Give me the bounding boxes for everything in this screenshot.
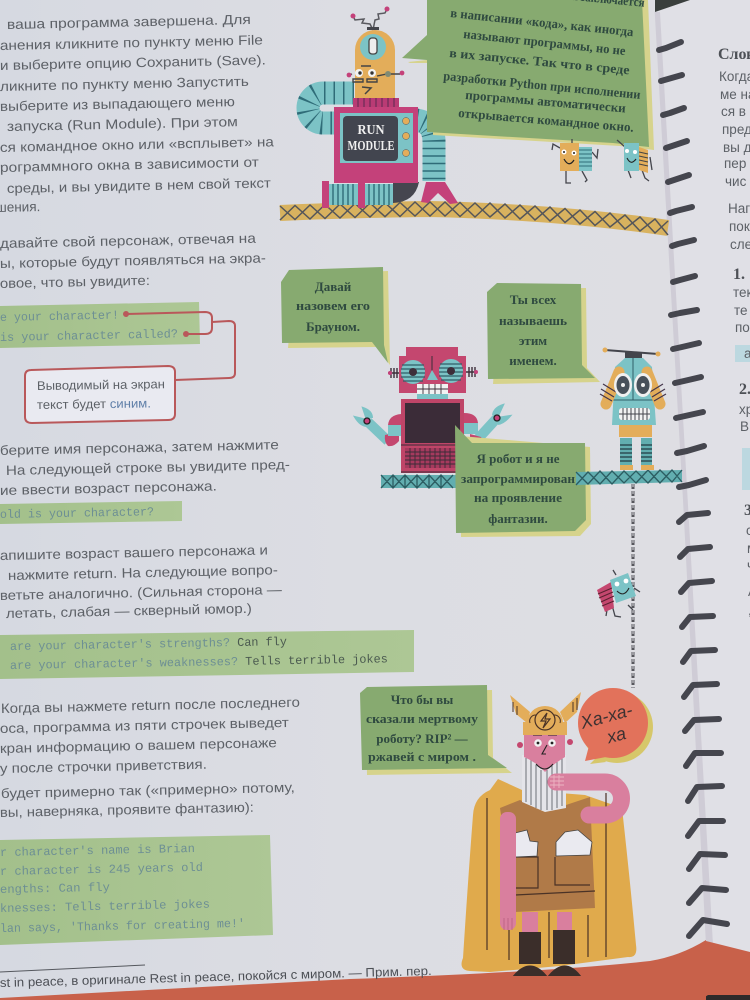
code block: greeting output: e your character! xyxy=(0,309,119,325)
collar xyxy=(353,98,399,109)
helmet xyxy=(523,722,567,735)
speech bubble: RIP: Что бы вы xyxy=(391,692,453,707)
head xyxy=(355,30,395,102)
speech bubble: RIP: сказали мертвому xyxy=(366,711,479,726)
legs and boots xyxy=(522,912,538,934)
speech bubble: code not launch: в их запуске. Так что в среде xyxy=(449,45,631,77)
speech bubble: you call everyone that xyxy=(487,283,600,384)
speech bubble: ha-ha-ha: Ха-ха- xyxy=(577,700,635,733)
body text: enter name: ие ввести возраст персонажа. xyxy=(0,478,217,498)
robot: run module xyxy=(308,6,458,208)
legs xyxy=(329,184,393,205)
next page text fragments: 1. xyxy=(733,266,745,283)
speech bubble: let's call him Brown: назовем его xyxy=(296,298,370,313)
speech bubble: ha-ha-ha xyxy=(577,688,653,764)
code block: age question: old is your character? xyxy=(0,505,154,522)
body xyxy=(401,399,464,473)
arms xyxy=(606,372,660,404)
code block: final output: r character's name is Brian xyxy=(0,842,195,860)
speech bubble: RIP xyxy=(360,685,512,775)
eyes xyxy=(401,360,425,384)
code block: final output: lan says, 'Thanks for creating me!' xyxy=(0,917,245,936)
body text: program output: оса, программа из пяти строчек выведет xyxy=(0,715,289,736)
speech bubble: ha-ha-ha: ха xyxy=(604,723,628,748)
screen label second line: MODULE xyxy=(348,139,394,154)
speech bubble: I am a robot xyxy=(455,425,591,537)
speech bubble: code not launch: в написании «кода», как иногда xyxy=(450,5,635,39)
left arm xyxy=(368,422,388,441)
code block: final output: r character is 245 years old xyxy=(0,861,203,879)
code block: greeting output: is your character called? xyxy=(0,327,178,345)
teeth xyxy=(619,408,650,420)
left arm xyxy=(500,812,516,930)
body text: program output: будет примерно так («примерно» потому, xyxy=(1,780,295,801)
conveyor: yellow xyxy=(280,202,668,235)
code block: strengths and weaknesses: are your character's strengths? Can fly xyxy=(10,635,287,654)
claws xyxy=(355,408,372,426)
next page text fragments: те xyxy=(734,303,748,318)
spiral binding xyxy=(659,42,727,936)
robot: pink with screen xyxy=(355,347,510,473)
body text: program output: вы, наверняка, проявите фантазию): xyxy=(0,800,254,820)
torso panel xyxy=(334,107,418,183)
footnote: st in peace, в оригинале Rest in peace, покойся с миром. — Прим. пер. xyxy=(0,964,432,990)
next page text fragments xyxy=(718,46,750,618)
body text: run module instructions: давайте свой персонаж, отвечая на xyxy=(0,231,257,251)
speech bubble: code not launch: разработки Python при исполнении xyxy=(443,68,642,102)
body text: run module instructions: ся командное окно или «всплывет» на xyxy=(0,134,275,155)
screen label: RUN xyxy=(358,123,384,138)
speech bubble: let's call him Brown: Давай xyxy=(315,279,352,294)
speech bubble: code not launch: называют программы, но не xyxy=(463,26,627,58)
speech bubble: let's call him Brown xyxy=(281,267,390,365)
speech bubble: code not launch: открывается командное окно. xyxy=(458,105,634,135)
body text: run module instructions: рограммного окна в зависимости от xyxy=(0,155,259,175)
body text: run module instructions xyxy=(0,12,275,291)
right arm xyxy=(416,120,434,181)
creature: climbing chain xyxy=(597,570,640,617)
speech bubble: I am a robot: фантазии. xyxy=(488,511,548,526)
body text: program output xyxy=(0,695,300,820)
right arm xyxy=(476,418,497,441)
body text: run module instructions: анения кликните по пункту меню File xyxy=(0,32,263,53)
skirt and legs xyxy=(619,425,652,437)
code block: greeting output xyxy=(0,302,200,348)
code block: final output: engths: Can fly xyxy=(0,881,110,897)
body text: program output: Когда вы нажмете return после последнего xyxy=(1,695,300,716)
next page text fragments: В xyxy=(740,419,749,434)
cape xyxy=(462,779,636,972)
code block: final output xyxy=(0,835,273,945)
next page text fragments: пер xyxy=(724,156,746,171)
beard xyxy=(522,755,566,812)
speech bubble: you call everyone that: называешь xyxy=(499,313,567,328)
left arm xyxy=(308,93,354,123)
eyes xyxy=(614,373,632,397)
robot: teal with propeller xyxy=(600,348,666,470)
code block: strengths and weaknesses xyxy=(0,630,414,679)
speech bubble: RIP: роботу? RIP² — xyxy=(376,731,469,746)
speech bubble: you call everyone that: этим xyxy=(519,333,547,348)
keyboard xyxy=(405,448,457,468)
body text: run module instructions: запуска (Run Module). При этом xyxy=(7,114,238,134)
body text: enter age xyxy=(0,542,283,621)
vest xyxy=(500,797,595,912)
speech bubble: you call everyone that: именем. xyxy=(509,353,557,368)
speech bubble: RIP: ржавей с миром . xyxy=(368,749,476,764)
creature: yellow xyxy=(552,139,598,183)
speech bubble: let's call him Brown: Брауном. xyxy=(306,319,360,334)
head xyxy=(406,347,458,357)
right arm xyxy=(556,782,622,815)
body text: enter name: берите имя персонажа, затем нажмите xyxy=(0,437,279,458)
speech bubble: code not launch: программы автоматически xyxy=(465,87,627,116)
face xyxy=(355,69,363,77)
teeth xyxy=(417,384,448,394)
body text: run module instructions: выберите из выпадающего меню xyxy=(0,94,235,114)
body text: enter name xyxy=(0,437,290,498)
code block: age question xyxy=(0,501,182,524)
body text: run module instructions: овое, что вы увидите: xyxy=(0,273,150,291)
face xyxy=(524,733,565,772)
chain xyxy=(632,484,634,688)
body text: run module instructions: среды, и вы увидите в нем свой текст xyxy=(7,175,271,196)
body text: enter age: ветьте аналогично. (Сильная сторона — xyxy=(0,582,283,603)
body text: run module instructions: ы, которые будут появляться на экра- xyxy=(0,250,266,271)
ears xyxy=(388,367,477,378)
next page text fragments: пок xyxy=(729,219,750,234)
speech bubble: I am a robot: на проявление xyxy=(474,490,562,505)
body text: enter age: нажмите return. На следующие вопро- xyxy=(8,562,278,583)
speech bubble: I am a robot: запрограммирован xyxy=(461,471,576,486)
viking robot xyxy=(462,692,636,975)
body text: enter age: апишите возраст вашего персонажа и xyxy=(0,542,268,563)
body text: run module instructions: ликните по пункту меню Запустить xyxy=(0,74,249,94)
antenna xyxy=(353,9,387,30)
next page text fragments: по xyxy=(735,320,750,335)
speech bubble: code not launch xyxy=(402,0,654,150)
body text: program output: кран информацию о вашем персонаже xyxy=(0,735,277,756)
next page text fragments: Наг xyxy=(728,201,750,216)
body text: enter age: летать, слабая — скверный юмор.) xyxy=(6,601,252,621)
code block: final output: knesses: Tells terrible jokes xyxy=(0,898,210,916)
platform: teal left xyxy=(381,475,456,488)
callout: blue output text xyxy=(25,311,235,423)
platform: teal right xyxy=(576,470,682,485)
body text: program output: у после строчки приветствия. xyxy=(0,757,207,776)
callout: blue output text: Выводимый на экран xyxy=(37,377,165,393)
callout: blue output text: текст будет синим. xyxy=(37,396,151,412)
next page text fragments: ся в xyxy=(721,104,746,119)
speech bubble: I am a robot: Я робот и я не xyxy=(477,451,560,466)
creature: cyan xyxy=(617,140,652,181)
code block: strengths and weaknesses: are your character's weaknesses? Tells terrible jokes xyxy=(10,652,388,673)
knobs xyxy=(402,118,410,156)
next page background xyxy=(640,0,750,1000)
body text: enter name: На следующей строке вы увидите пред- xyxy=(6,457,290,478)
body text: run module instructions: ваша программа завершена. Для xyxy=(7,12,251,32)
speech bubble: you call everyone that: Ты всех xyxy=(510,292,557,307)
next page text fragments: чис xyxy=(725,174,747,189)
body text: run module instructions: и выберите опцию Сохранить (Save). xyxy=(0,52,266,73)
papers xyxy=(515,830,538,857)
